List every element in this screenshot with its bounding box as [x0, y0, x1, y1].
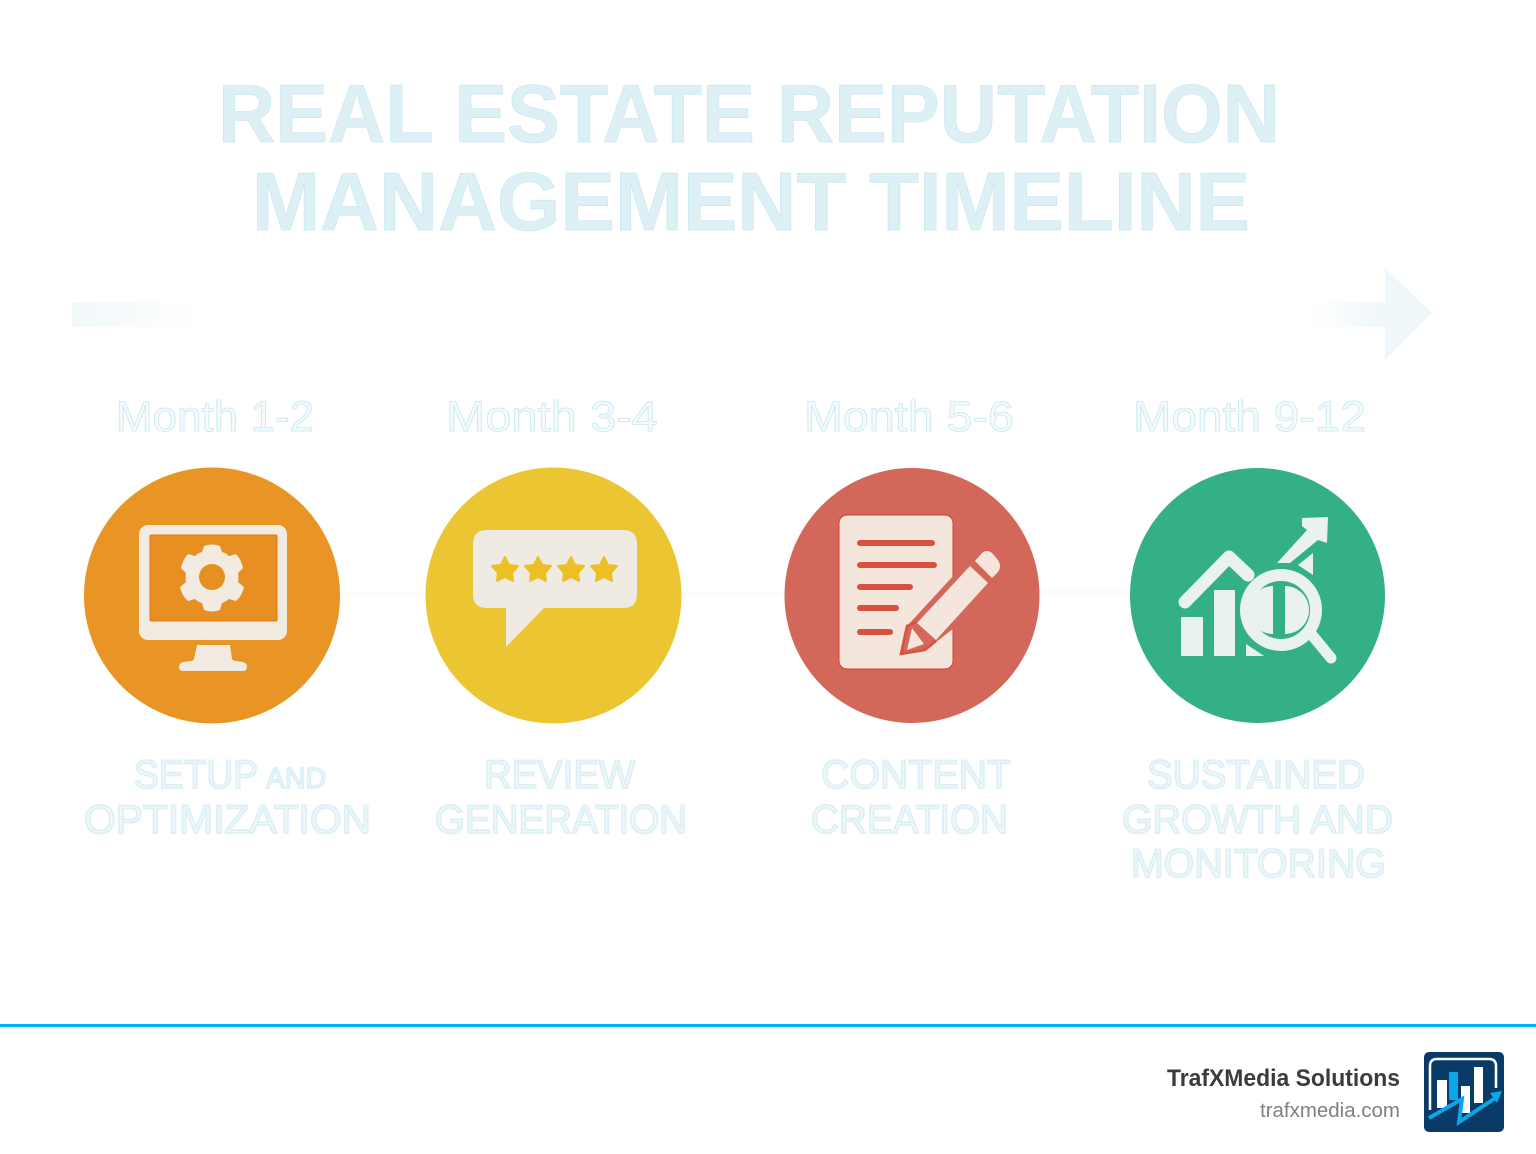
step labels: MONITORING: [1131, 842, 1386, 886]
step 4: growth icon: [1130, 468, 1385, 723]
footer rule: [0, 1024, 1536, 1027]
title: REAL ESTATE REPUTATION: [218, 67, 1280, 160]
step labels: [84, 753, 1393, 886]
step labels: CREATION: [811, 798, 1008, 842]
icon: brand logo: [1424, 1052, 1504, 1132]
brand name and url: [1167, 1065, 1400, 1122]
month labels: Month 1-2: [116, 393, 314, 441]
step labels: CONTENT: [821, 753, 1011, 797]
step 2: review icon: [426, 468, 682, 724]
brand name and url: trafxmedia.com: [1260, 1100, 1400, 1122]
step labels: SETUP: [134, 753, 258, 797]
month labels: Month 3-4: [446, 393, 658, 441]
step labels: GENERATION: [435, 798, 687, 842]
connector line: [340, 589, 1130, 598]
step labels: OPTIMIZATION: [84, 798, 371, 842]
month labels: [116, 393, 1366, 441]
month labels: Month 9-12: [1133, 393, 1366, 441]
brand name and url: TrafXMedia Solutions: [1167, 1065, 1400, 1092]
month labels: Month 5-6: [804, 393, 1014, 441]
step labels: AND: [266, 763, 326, 795]
timeline arrow: [72, 268, 1432, 360]
step 3: content icon: [784, 468, 1040, 723]
step labels: SUSTAINED: [1147, 753, 1365, 797]
step 1: setup icon: [84, 468, 340, 724]
title: [218, 67, 1280, 248]
title: MANAGEMENT TIMELINE: [252, 155, 1250, 248]
step labels: REVIEW: [484, 753, 635, 797]
step labels: GROWTH AND: [1122, 798, 1393, 842]
